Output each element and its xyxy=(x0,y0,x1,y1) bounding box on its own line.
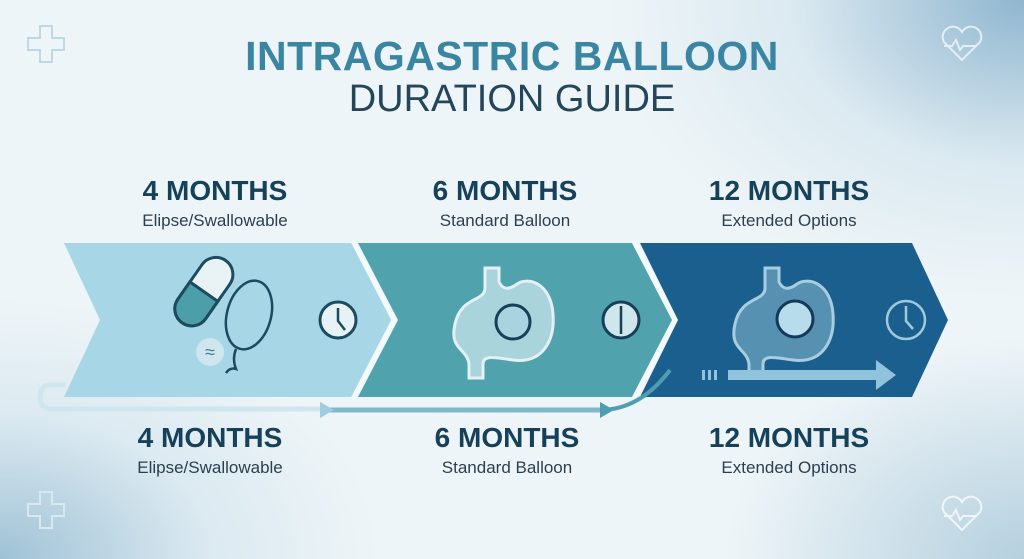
icon: heart top right xyxy=(943,27,981,60)
top label 1: 4 MONTHS xyxy=(143,175,287,206)
bottom label 3: Extended Options xyxy=(721,458,857,477)
icon: clock 1 xyxy=(320,302,356,338)
top label 1 xyxy=(142,175,288,230)
icon: clock 2 xyxy=(603,302,639,338)
icon: cross bottom left xyxy=(28,492,64,528)
icon: clock 3 xyxy=(887,301,925,339)
chevron 1: ≈ xyxy=(205,342,215,362)
bottom label 2: 6 MONTHS xyxy=(435,422,579,453)
icon: balloon xyxy=(219,275,279,373)
arrow: timeline path xyxy=(40,370,670,418)
icon: heart bottom right xyxy=(943,497,981,530)
top label 3: Extended Options xyxy=(721,211,857,230)
top label 3 xyxy=(709,175,869,230)
bottom label 1: Elipse/Swallowable xyxy=(137,458,283,477)
top label 1: Elipse/Swallowable xyxy=(142,211,288,230)
top label 2: 6 MONTHS xyxy=(433,175,577,206)
bottom label 1: 4 MONTHS xyxy=(138,422,282,453)
icon: stomach 3 xyxy=(734,268,833,378)
subtitle: DURATION GUIDE xyxy=(349,78,675,120)
chevron 1 xyxy=(64,243,392,397)
arrow: extended xyxy=(702,360,896,390)
top label 2 xyxy=(433,175,577,230)
chevron 3 xyxy=(634,241,948,399)
bottom label 3 xyxy=(709,422,869,477)
top label 2: Standard Balloon xyxy=(440,211,570,230)
icon: stomach xyxy=(454,268,553,378)
bottom label 2: Standard Balloon xyxy=(442,458,572,477)
icon: pill xyxy=(168,251,240,333)
top label 3: 12 MONTHS xyxy=(709,175,869,206)
bottom label 2 xyxy=(435,422,579,477)
icon: cross top left xyxy=(28,26,64,62)
chevron 2 xyxy=(353,241,672,399)
title: INTRAGASTRIC BALLOON xyxy=(245,33,779,79)
bottom label 1 xyxy=(137,422,283,477)
bottom label 3: 12 MONTHS xyxy=(709,422,869,453)
